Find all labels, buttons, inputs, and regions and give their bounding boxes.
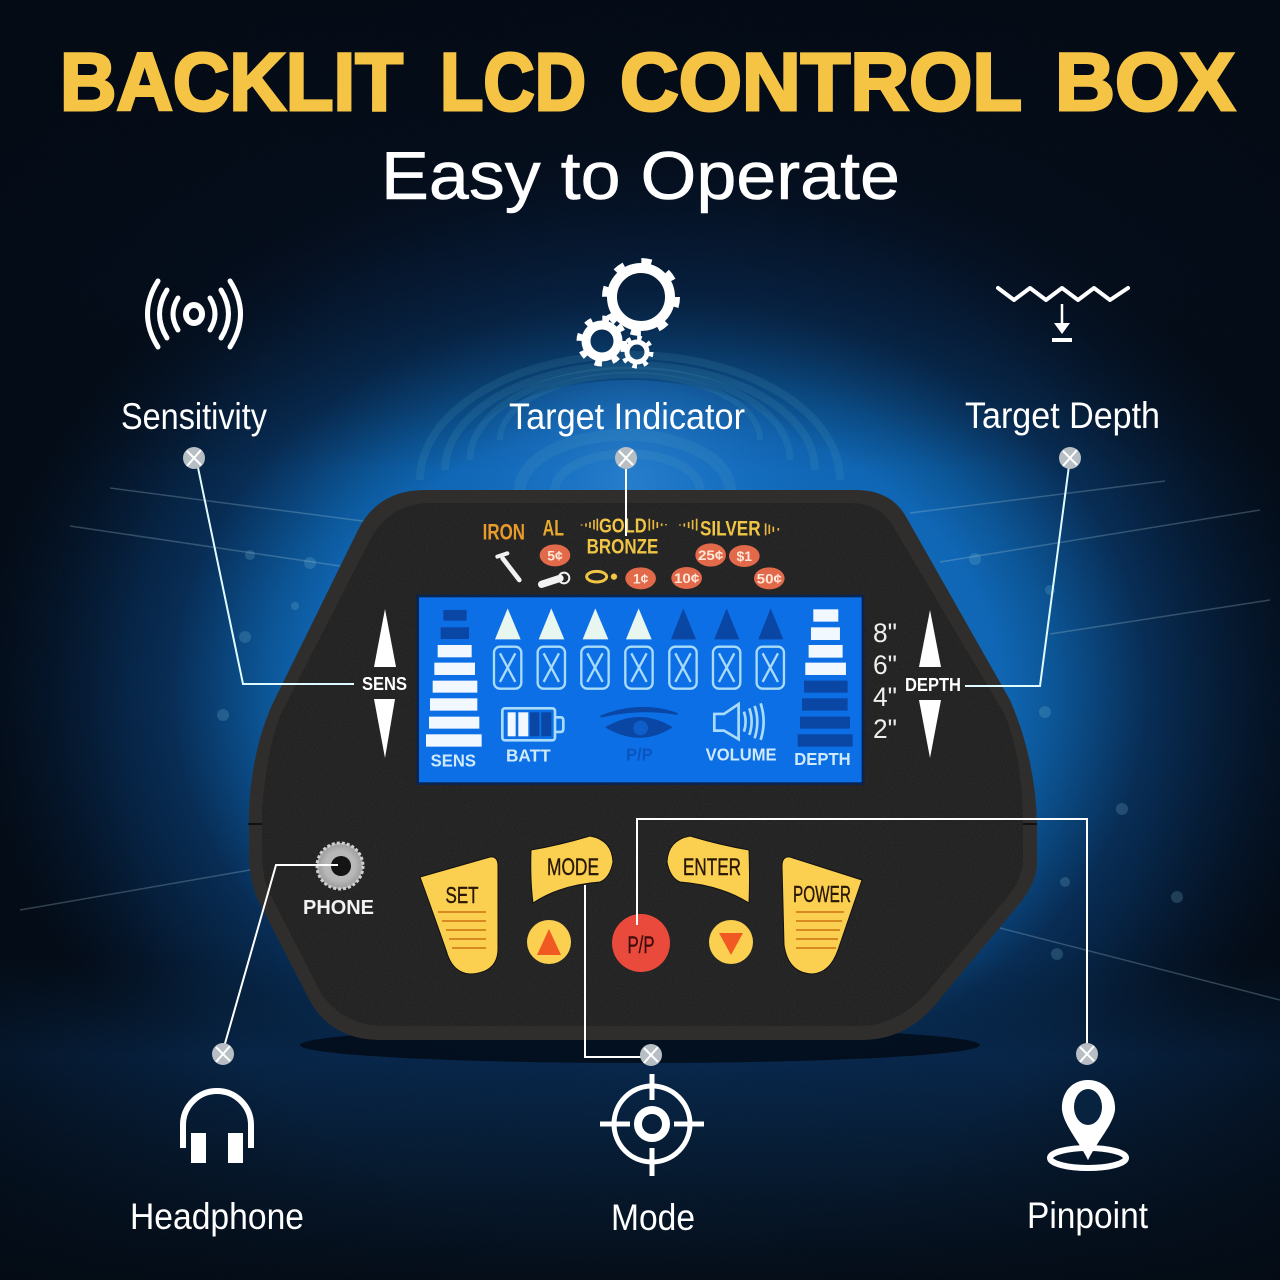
- icon: mode target: [600, 1074, 704, 1176]
- signal ticks: [582, 519, 778, 535]
- label: headphone: Headphone: [130, 1196, 304, 1237]
- sens adjust arrows: [362, 609, 407, 758]
- lcd labels: P/P: [626, 745, 653, 765]
- legend labels: AL: [543, 515, 564, 540]
- lcd labels: DEPTH: [794, 749, 851, 769]
- panel: control box: [240, 480, 1040, 1040]
- button: pinpoint: [612, 914, 670, 972]
- lcd labels: SENS: [431, 751, 476, 771]
- coins: 10¢: [674, 570, 700, 586]
- metal target legend: [483, 515, 785, 589]
- button: enter: ENTER: [683, 854, 741, 881]
- label: pinpoint: Pinpoint: [1027, 1195, 1149, 1236]
- device face: [262, 503, 1023, 1026]
- button: set: [420, 857, 498, 974]
- label: target indicator: Target Indicator: [509, 396, 745, 437]
- coins: 50¢: [757, 570, 782, 586]
- legend labels: SILVER: [700, 516, 761, 540]
- lcd labels: BATT: [506, 746, 551, 766]
- coins: 5¢: [547, 547, 563, 563]
- depth adjust arrows: [905, 610, 961, 758]
- button: up: [527, 920, 571, 964]
- label: mode: Mode: [611, 1197, 695, 1238]
- depth scale: 4": [873, 682, 897, 712]
- connector dots: [183, 447, 1098, 1066]
- lcd labels: VOLUME: [706, 745, 777, 765]
- depth scale: 6": [873, 650, 897, 680]
- button: set: SET: [446, 882, 478, 908]
- title line: backlit lcd control box: CONTROL: [620, 37, 1022, 128]
- legend labels: BRONZE: [587, 534, 658, 558]
- subtitle: Easy to Operate: [381, 138, 900, 214]
- target triangles: [495, 608, 783, 639]
- title: [60, 37, 1235, 214]
- coins: 25¢: [698, 547, 724, 563]
- icon: pull tab: [542, 573, 569, 584]
- depth adjust arrows: DEPTH: [905, 675, 961, 695]
- legend labels: IRON: [483, 519, 525, 544]
- icon: screw: [497, 553, 519, 580]
- button: enter: [667, 836, 750, 903]
- sens adjust arrows: SENS: [362, 674, 407, 694]
- icon: eye: [601, 708, 677, 738]
- icon: target depth: [998, 288, 1128, 342]
- phone jack: [303, 843, 374, 919]
- icon: pinpoint: [1050, 1080, 1126, 1168]
- icon: sensitivity: [148, 281, 240, 347]
- title line: backlit lcd control box: BACKLIT: [60, 37, 403, 128]
- icon: ring: [587, 571, 617, 582]
- depth scale: [873, 618, 897, 744]
- lcd screen: [418, 596, 863, 784]
- button: pinpoint: P/P: [628, 932, 654, 959]
- segment digits: [494, 647, 784, 689]
- lcd labels: [431, 745, 851, 771]
- sens bars: [426, 610, 482, 747]
- button: mode: MODE: [547, 854, 599, 881]
- device shadow: [300, 1027, 980, 1063]
- title line: backlit lcd control box: LCD: [440, 37, 586, 128]
- leader lines: [196, 458, 1087, 1057]
- icon: battery: [502, 708, 563, 740]
- depth bars: [798, 609, 853, 747]
- legend labels: [483, 515, 761, 558]
- label: target depth: Target Depth: [965, 395, 1160, 436]
- icon: headphone: [183, 1091, 251, 1163]
- icon: speaker: [714, 703, 764, 740]
- title line: backlit lcd control box: BOX: [1055, 37, 1235, 128]
- depth scale: 2": [873, 714, 897, 744]
- icon: gears: [580, 262, 676, 366]
- label: sensitivity: Sensitivity: [121, 396, 267, 437]
- button: power: POWER: [793, 881, 851, 907]
- phone jack: PHONE: [303, 897, 374, 919]
- coins: $1: [737, 548, 752, 564]
- device outer rim: [249, 490, 1037, 1040]
- coins: [540, 543, 785, 589]
- coins: 1¢: [633, 570, 649, 586]
- button: mode: [531, 836, 613, 903]
- legend labels: GOLD: [599, 515, 647, 538]
- depth scale: 8": [873, 618, 897, 648]
- button: down: [709, 920, 753, 964]
- button: power: [782, 857, 862, 974]
